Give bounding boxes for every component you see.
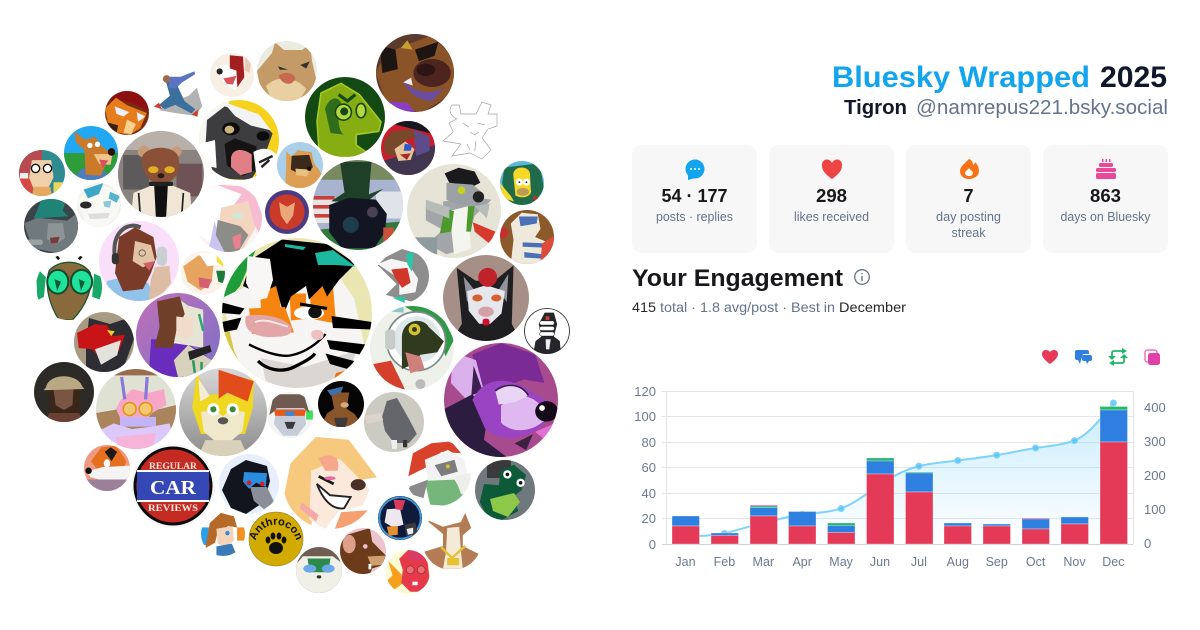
icon: speech bubble: [686, 160, 704, 180]
right axis labels: 300: [1144, 434, 1166, 449]
avatar: Anthrocon: [248, 512, 304, 566]
icon: likes heart: [1042, 350, 1058, 364]
avatar: black fursuit in top hat: [313, 160, 403, 250]
stat value: 863: [1090, 186, 1121, 206]
avatar: brown bear in office: [118, 131, 204, 217]
cumulative line: [686, 404, 1113, 536]
avatar: red-haired dog: [210, 53, 254, 97]
icon: replies bubbles: [1075, 350, 1092, 364]
month labels: Jun: [870, 555, 890, 569]
text: CAR: CAR: [150, 477, 197, 499]
avatar: german shepherd: [277, 142, 323, 188]
avatar: orange otter: [84, 445, 130, 491]
stat value: 54 · 177: [662, 186, 728, 206]
avatar: grey wolf plane: [407, 164, 501, 258]
avatar: green raccoon in blue glasses: [296, 547, 342, 593]
title: Bluesky Wrapped: [832, 61, 1090, 94]
icon: heart: [822, 159, 842, 179]
avatar: raccoon in shades: [267, 392, 313, 438]
left axis labels: 60: [642, 460, 656, 475]
avatar: red dragon: [74, 312, 134, 372]
bar: Jul: [906, 472, 933, 544]
month labels: Dec: [1102, 555, 1125, 569]
left axis labels: 80: [642, 435, 656, 450]
panel: posts and replies: [632, 145, 757, 253]
month labels: Apr: [792, 555, 812, 569]
avatar: man in pith helmet: [34, 362, 94, 422]
avatar: astronaut: [370, 306, 454, 390]
avatar: santa hat grey wolf: [405, 440, 471, 506]
avatar: orange fox: [105, 91, 149, 135]
engagement summary: total · 1.8 avg/post · Best in: [660, 299, 835, 315]
stat value: 7: [963, 186, 974, 206]
avatar: blonde character: [283, 435, 377, 529]
bar: Oct: [1022, 518, 1050, 544]
month labels: Jul: [911, 555, 927, 569]
user name and handle: Tigron: [844, 97, 907, 119]
avatar: pencil sketch: [443, 102, 497, 159]
cumulative area: [686, 404, 1113, 544]
avatar: orange dog on blue sky: [64, 126, 118, 180]
avatar: purse and cat: [378, 496, 422, 540]
avatar: orange and white sketch: [181, 251, 225, 295]
line points: [721, 400, 1116, 536]
icon: flame: [960, 159, 979, 179]
stat label: day posting: [936, 210, 1001, 224]
avatar: green crocodile fursuit: [475, 460, 535, 520]
avatar: black and blue bird: [219, 454, 279, 514]
avatar: tiger (featured): [222, 238, 372, 388]
left axis labels: 40: [642, 486, 656, 501]
month labels: [675, 555, 1125, 569]
avatar: green dinosaur: [305, 77, 385, 157]
right axis labels: 0: [1144, 536, 1151, 551]
avatar: purple plaid character: [136, 293, 220, 377]
avatar: hyena: [376, 34, 454, 112]
avatar cluster: [19, 34, 570, 594]
stat label: days on Bluesky: [1060, 210, 1151, 224]
avatar: badger: [199, 100, 279, 180]
left axis labels: 0: [649, 537, 656, 552]
icon: quotes squares: [1145, 350, 1160, 365]
stat label: [936, 210, 1001, 240]
combined bar and line chart: [634, 384, 1166, 569]
month labels: Mar: [753, 555, 774, 569]
bar: Dec: [1100, 406, 1128, 544]
stat label: likes received: [794, 210, 869, 224]
avatar: grey possum on concrete: [364, 392, 424, 452]
text: REGULAR: REGULAR: [149, 461, 198, 471]
panel: day posting streak: [906, 145, 1031, 253]
avatar: brown bear on black: [318, 381, 364, 427]
bar: Feb: [711, 533, 738, 544]
left axis labels: 100: [634, 409, 656, 424]
user name and handle: @namrepus221.bsky.social: [916, 97, 1168, 119]
heading: Your Engagement: Your Engagement: [632, 265, 843, 292]
bar: Jun: [866, 458, 894, 544]
stat label: streak: [952, 226, 986, 240]
bar: Mar: [750, 505, 778, 544]
avatar: brown-haired red and purple: [381, 121, 435, 175]
avatar: cougar: [257, 41, 317, 101]
stat label: posts · replies: [656, 210, 733, 224]
avatar: skater: [154, 71, 202, 117]
avatar: purple ring red badge: [265, 190, 309, 234]
avatar: Regular Car Reviews logo: [131, 444, 215, 528]
stat value: 298: [816, 186, 847, 206]
icon: reposts arrows: [1112, 351, 1124, 363]
avatar: pink character with glasses: [96, 369, 176, 449]
icon: repost arrowheads: [1108, 348, 1128, 366]
avatar: black fox fursuit: [443, 255, 529, 341]
engagement summary: 415: [632, 299, 656, 315]
bar: Apr: [788, 512, 816, 544]
right axis labels: [1144, 400, 1166, 551]
right axis labels: 400: [1144, 400, 1166, 415]
bar: May: [828, 523, 855, 544]
grid lines and axes: [662, 391, 1134, 544]
bar: Aug: [944, 523, 972, 544]
avatar: lion with microphone: [99, 221, 179, 301]
month labels: Nov: [1063, 555, 1086, 569]
stacked bars: [672, 406, 1128, 544]
text: REVIEWS: REVIEWS: [148, 503, 198, 513]
right axis labels: 200: [1144, 468, 1166, 483]
avatar: black and white figure: [524, 308, 570, 354]
icon: info: [855, 270, 869, 284]
month labels: Sep: [986, 555, 1008, 569]
avatar: bull with gold chain: [422, 510, 482, 570]
left axis labels: 20: [642, 511, 656, 526]
engagement summary: [632, 299, 906, 315]
bar: Nov: [1061, 517, 1088, 544]
panel: days on Bluesky: [1043, 145, 1168, 253]
avatar: glasses character: [19, 150, 65, 196]
avatar: white wolf with red mouth: [375, 249, 429, 303]
right axis labels: 100: [1144, 502, 1166, 517]
avatar: blue and white wolf: [77, 183, 121, 227]
month labels: Feb: [714, 555, 735, 569]
icon: cake: [1096, 159, 1116, 179]
avatar: purple wolf: [444, 343, 558, 457]
month labels: Oct: [1026, 555, 1046, 569]
month labels: Aug: [947, 555, 969, 569]
title: 2025: [1100, 61, 1167, 94]
avatar: white and blue suit: [497, 210, 554, 264]
avatar: pink and white haired character: [194, 184, 262, 252]
bar: Jan: [672, 516, 700, 544]
avatar: brown-haired character: [201, 512, 245, 556]
avatar: grey creature in top hat: [24, 199, 78, 253]
engagement summary: December: [839, 299, 906, 315]
avatar: yellow fox: [179, 368, 267, 456]
avatar: green-eyed bug: [36, 254, 102, 320]
avatar: brown rat: [340, 528, 386, 574]
text: Anthrocon: Anthrocon: [250, 518, 302, 540]
panel: likes received: [769, 145, 894, 253]
left axis labels: 120: [634, 384, 656, 399]
chart legend icons: [1042, 348, 1160, 366]
avatar: flaky pink character: [386, 550, 430, 594]
month labels: May: [829, 555, 854, 569]
bar: Sep: [983, 524, 1010, 544]
left axis labels: [634, 384, 656, 552]
avatar: Homer in green: [500, 161, 544, 205]
month labels: Jan: [675, 555, 696, 569]
